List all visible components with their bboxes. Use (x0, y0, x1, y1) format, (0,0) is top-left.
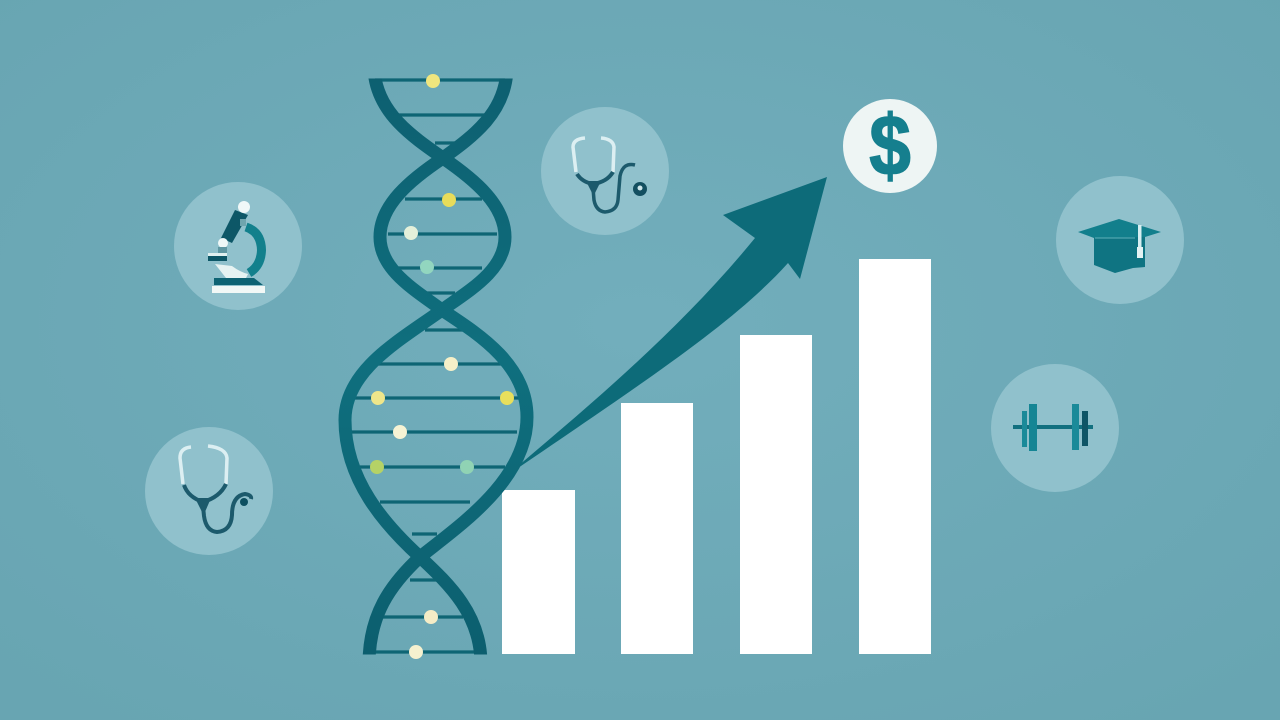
icon: microscope (174, 182, 302, 310)
DNA nucleotide dots (370, 74, 514, 659)
bar 3 (740, 335, 812, 654)
DNA strand left to right (345, 70, 505, 664)
growth arrow (505, 177, 827, 477)
icon: stethoscope lower left (145, 427, 273, 555)
DNA strands (345, 70, 527, 664)
icon: dollar coin (843, 98, 937, 193)
icon: dumbbell (991, 364, 1119, 492)
bar chart (502, 259, 931, 654)
icon: stethoscope upper (541, 107, 669, 235)
bar 4 (859, 259, 931, 654)
icon: dollar coin: $ (869, 98, 911, 193)
DNA double helix (345, 70, 527, 664)
bar 1 (502, 490, 575, 654)
DNA rungs (350, 80, 522, 652)
icon: graduation cap (1056, 176, 1184, 304)
DNA strand right to left (369, 70, 527, 664)
bar 2 (621, 403, 693, 654)
